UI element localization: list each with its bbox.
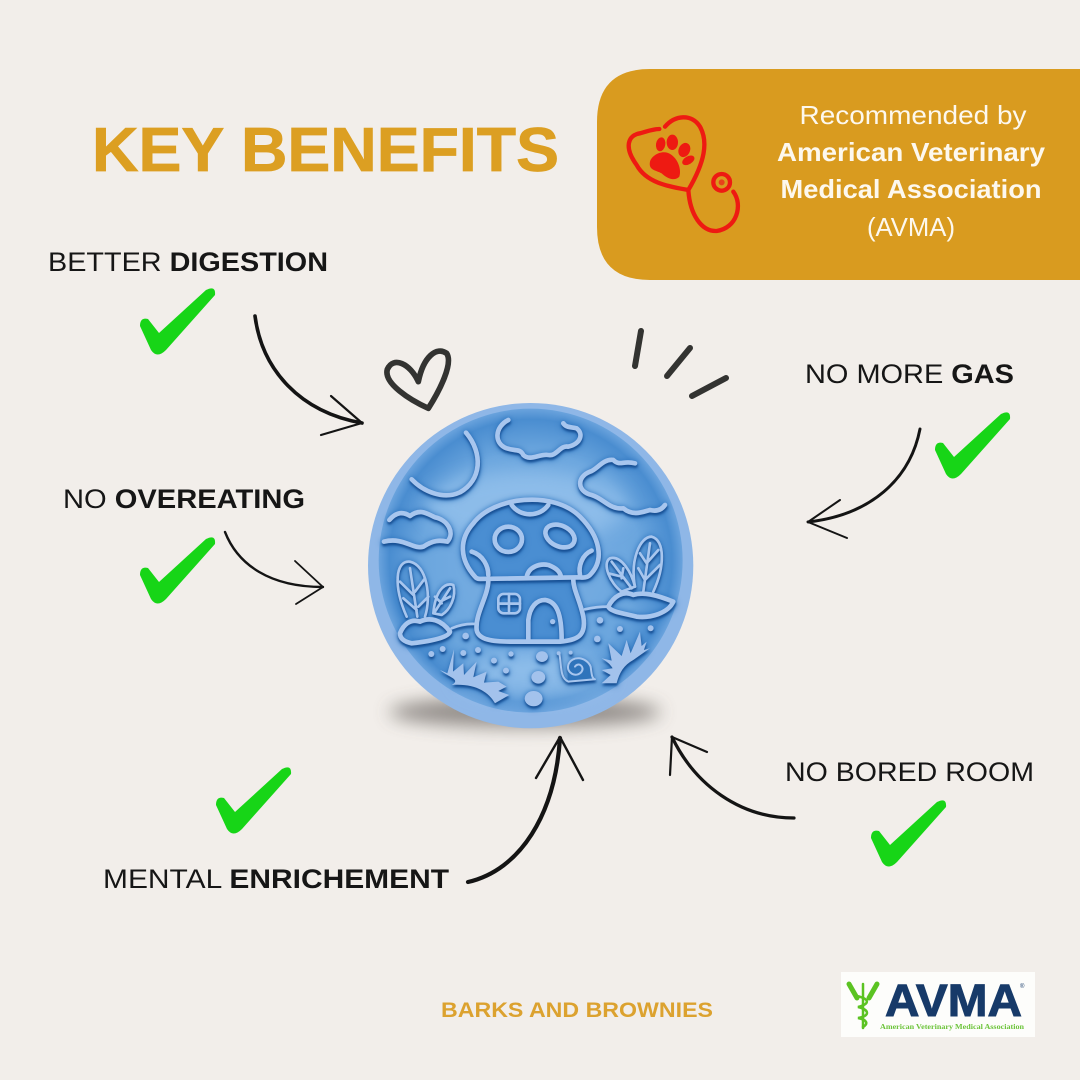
icon: check mark 4 <box>871 800 946 866</box>
AVMA logo: AVMA <box>885 975 1022 1026</box>
title: KEY BENEFITS <box>92 116 559 185</box>
AVMA logo <box>841 972 1035 1037</box>
icon: check mark 1 <box>140 288 215 354</box>
clouds <box>384 420 665 547</box>
bowl: mushroom house slow feeder <box>368 403 693 728</box>
icon: heart stethoscope with paw <box>629 117 738 231</box>
panel: AVMA recommendation badge <box>597 69 1080 280</box>
badge text: American Veterinary <box>777 137 1046 167</box>
right plant <box>607 537 673 617</box>
benefit label: no bored room: NO BORED ROOM <box>785 757 1034 787</box>
arrow: gas to bowl <box>808 429 920 538</box>
arrow: bored room to bowl <box>670 737 794 818</box>
mushroom house <box>452 500 608 642</box>
AVMA logo: American Veterinary Medical Association <box>880 1022 1025 1031</box>
arrow: digestion to bowl <box>255 316 362 435</box>
benefit label: no more gas: NO MORE GAS <box>805 359 1014 389</box>
snail <box>557 651 595 682</box>
icon: doodle burst lines <box>635 331 726 396</box>
icon: doodle heart <box>387 351 448 408</box>
badge text: Recommended by <box>800 100 1026 130</box>
benefit label: no overeating: NO OVEREATING <box>63 484 305 514</box>
brand name: BARKS AND BROWNIES <box>441 999 713 1022</box>
icon: check mark 2 <box>140 537 215 604</box>
benefit label: better digestion: BETTER DIGESTION <box>48 247 328 277</box>
pebbles and dots <box>428 617 654 706</box>
arrow: enrichment to bowl <box>468 737 583 882</box>
AVMA logo: ® <box>1020 983 1025 990</box>
arrow: overeating to bowl <box>225 532 323 604</box>
moon <box>412 433 478 495</box>
left plant <box>398 562 454 643</box>
badge text: Medical Association <box>780 174 1042 204</box>
icon: check mark 5 <box>216 767 291 834</box>
icon: check mark 3 <box>935 412 1010 478</box>
icon: green caduceus <box>849 984 877 1028</box>
benefit label: mental enrichement: MENTAL ENRICHEMENT <box>103 864 449 894</box>
grass <box>440 632 650 703</box>
bowl shadow <box>389 697 661 727</box>
badge text: (AVMA) <box>867 212 955 242</box>
badge text <box>777 100 1046 242</box>
